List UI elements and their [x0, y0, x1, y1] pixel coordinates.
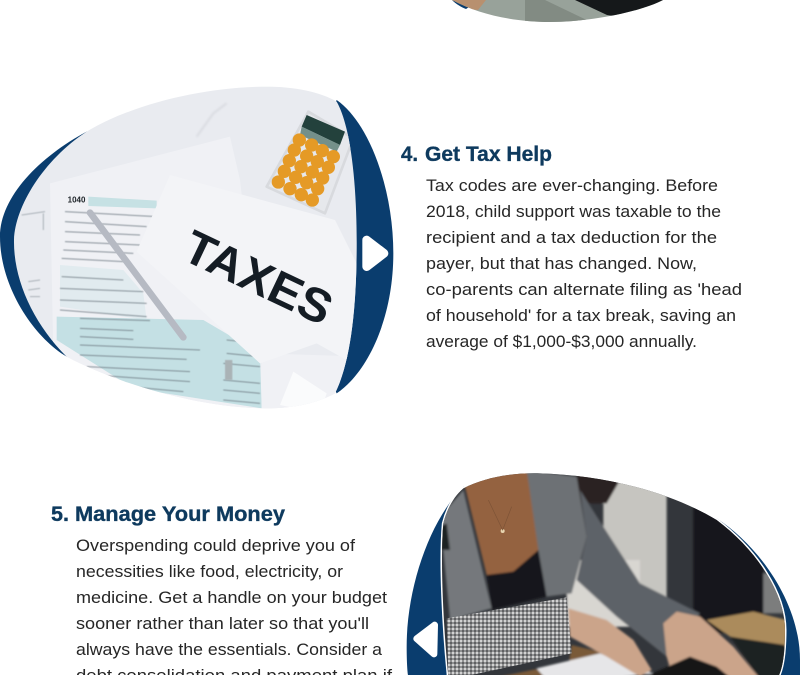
heading: step 5: Manage Your Money	[75, 503, 285, 526]
text block: step 5 body: sooner rather than later so that you'll	[76, 614, 369, 633]
text block: step 5 body: necessities like food, electricity, or	[76, 562, 343, 581]
text block: step 5 body: Overspending could deprive you of	[76, 536, 355, 555]
text block: step 5 body	[76, 536, 392, 675]
label on envelope: TAXES	[175, 220, 341, 336]
icon: right arrow	[367, 240, 384, 267]
photo: woman typing	[433, 467, 800, 675]
text block: step 4 body: payer, but that has changed. Now,	[426, 254, 697, 273]
text block: step 4 body: recipient and a tax deduction for the	[426, 228, 717, 247]
text block: step 5 body: medicine. Get a handle on your budget	[76, 588, 387, 607]
photo: tax forms and calculator	[14, 86, 357, 408]
text block: step 4 body: of household' for a tax break, saving an	[426, 306, 736, 325]
white outline	[442, 473, 785, 675]
panel: step 5 woman at laptop photo	[407, 467, 800, 675]
calculator	[267, 112, 353, 213]
navy blob backing	[407, 487, 800, 675]
text block: step 4 body	[426, 176, 742, 351]
pencil	[90, 213, 183, 337]
text block: step 4 body: Tax codes are ever-changing. Before	[426, 176, 718, 195]
cropped photo from previous section	[452, 0, 663, 22]
heading: step 4: 4.	[401, 143, 418, 166]
icon: left arrow	[417, 625, 435, 654]
panel: step 4 taxes photo	[0, 80, 400, 420]
text block: step 4 body: co-parents can alternate filing as 'head	[426, 280, 742, 299]
photo: tax forms and calculator: 1040	[68, 195, 86, 204]
heading: step 5: 5.	[51, 503, 69, 526]
text block: step 5 body: always have the essentials. Consider a	[76, 640, 383, 659]
text block: step 4 body: average of $1,000-$3,000 annually.	[426, 332, 697, 351]
heading: step 4: Get Tax Help	[425, 143, 552, 166]
navy blob backing	[0, 100, 393, 393]
text block: step 4 body: 2018, child support was taxable to the	[426, 202, 721, 221]
